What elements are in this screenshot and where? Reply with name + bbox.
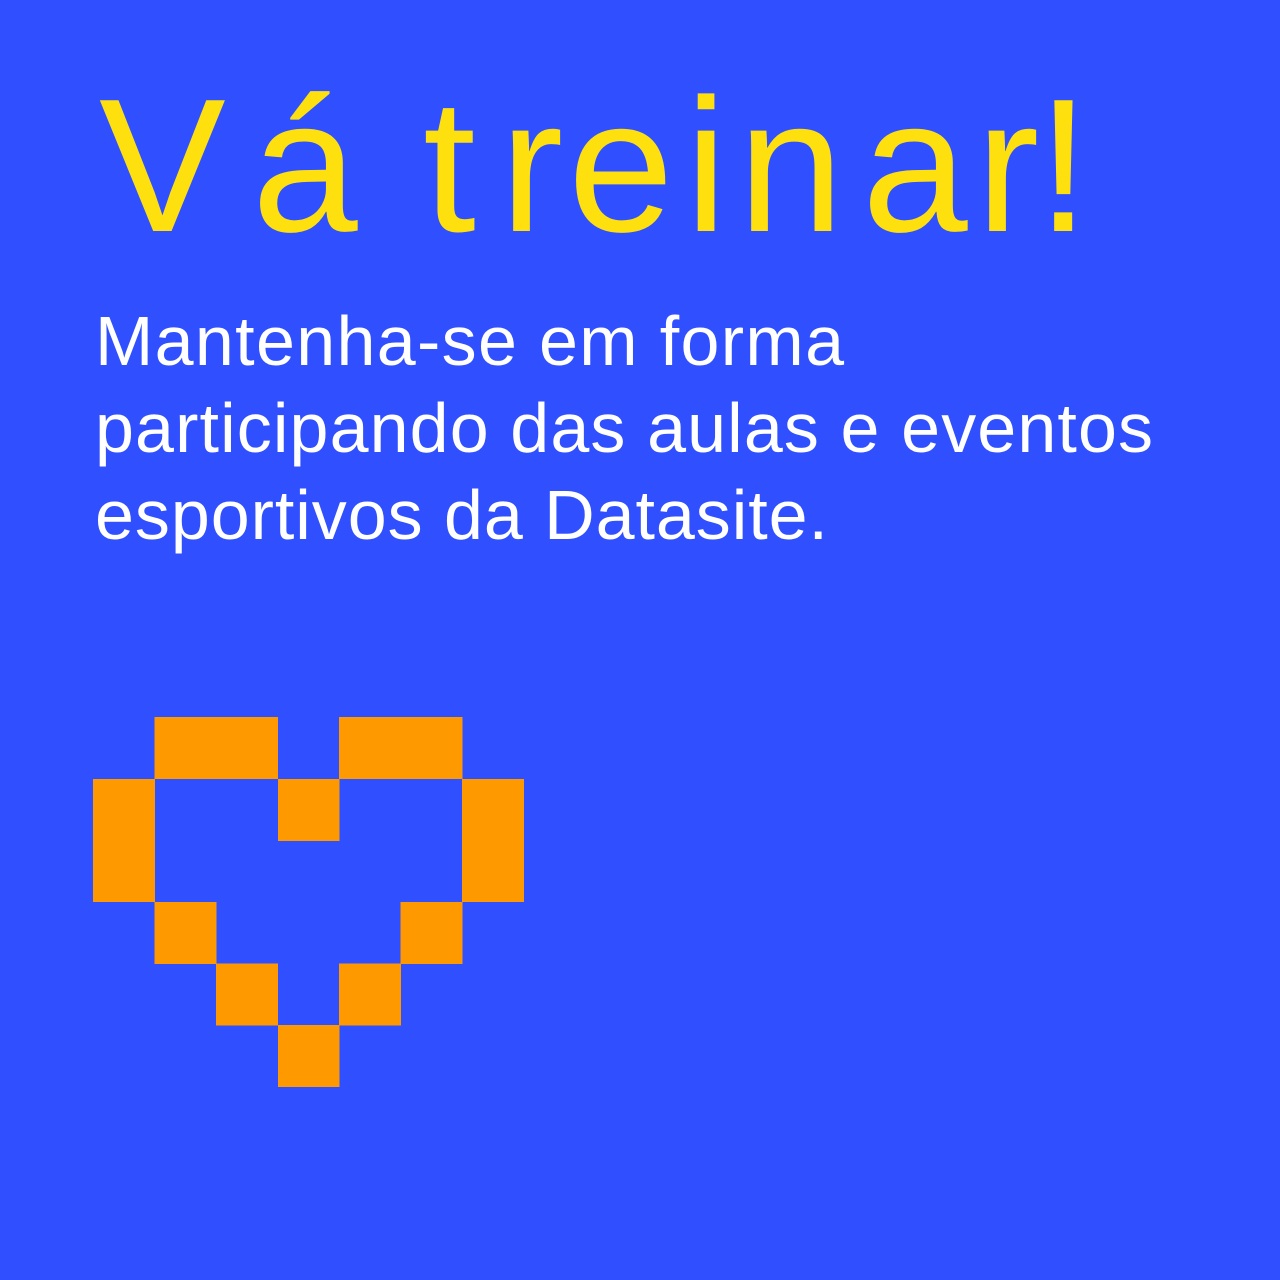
icon: pixel heart [93, 717, 524, 1087]
body text [95, 302, 1153, 554]
title: Vá treinar! [0, 60, 1090, 272]
body text: participando das aulas e eventos [95, 389, 1153, 467]
body text: esportivos da Datasite. [95, 476, 828, 554]
body text: Mantenha-se em forma [95, 302, 844, 380]
